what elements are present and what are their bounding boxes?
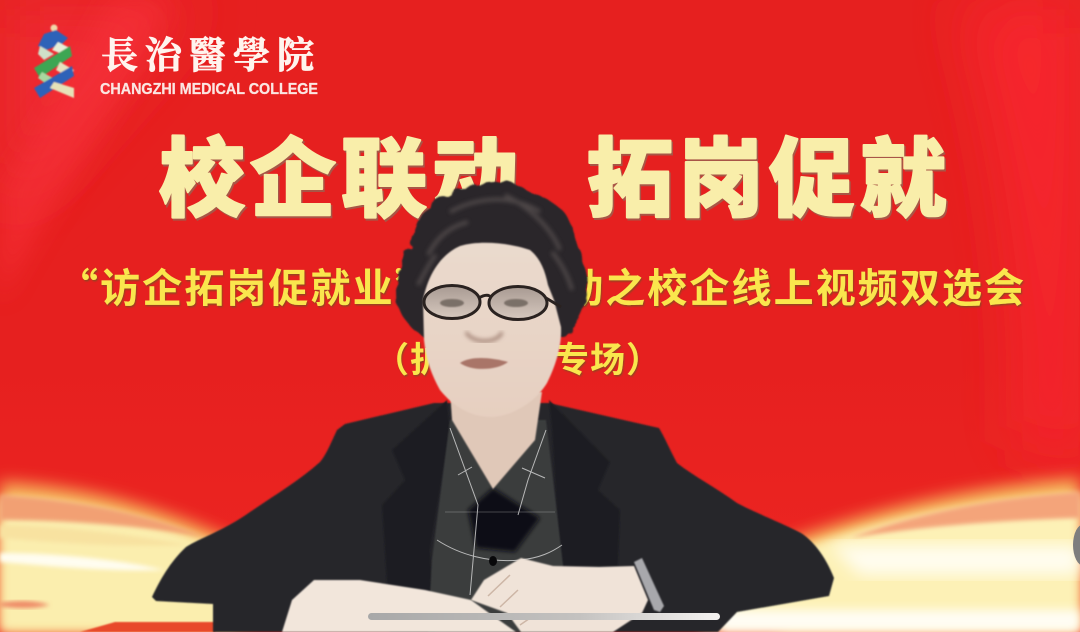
jacket	[152, 403, 834, 632]
title	[159, 109, 952, 236]
speaker portrait	[152, 181, 834, 632]
left arm hand	[282, 580, 516, 632]
title text: 校企联动	[159, 109, 523, 234]
side handle	[1073, 524, 1080, 566]
opening quote: “	[58, 256, 98, 314]
school name in English: CHANGZHI MEDICAL COLLEGE	[100, 81, 318, 98]
golden ribbons at the bottom	[0, 478, 1080, 632]
finger lines	[488, 575, 536, 625]
right arm hand	[471, 558, 648, 632]
home indicator bar	[368, 613, 720, 620]
icon: double helix emblem	[34, 24, 74, 98]
nose	[466, 332, 502, 341]
hair back	[398, 181, 588, 336]
title shadow	[160, 111, 952, 236]
shirt button	[489, 556, 497, 566]
hair highlights	[418, 195, 572, 290]
shirt collar shadow	[468, 488, 540, 552]
glasses	[424, 286, 561, 320]
shirt	[428, 420, 563, 632]
mouth	[460, 358, 508, 369]
title text: 拓岗促就	[587, 109, 951, 234]
wristwatch	[634, 558, 664, 612]
title shadow: 校企联动	[160, 111, 524, 236]
eyes	[440, 299, 464, 307]
left lens	[424, 286, 480, 318]
subtitle line one: 访企拓岗促就业”专项行动之校企线上视频双选会	[100, 256, 1026, 314]
school name in Chinese: 長治醫學院	[101, 25, 321, 79]
title shadow: 拓岗促就	[588, 111, 952, 236]
neck	[450, 390, 542, 489]
frame bridge and temple	[479, 295, 561, 307]
subtitle	[58, 256, 1026, 383]
jacket lapels	[382, 400, 620, 632]
title text	[159, 109, 951, 234]
subtitle line two: （护理医学专场）	[374, 332, 662, 383]
right lens	[489, 286, 547, 320]
logo: Changzhi Medical College	[34, 24, 321, 98]
shirt grid pattern	[437, 428, 562, 595]
face	[423, 243, 561, 417]
